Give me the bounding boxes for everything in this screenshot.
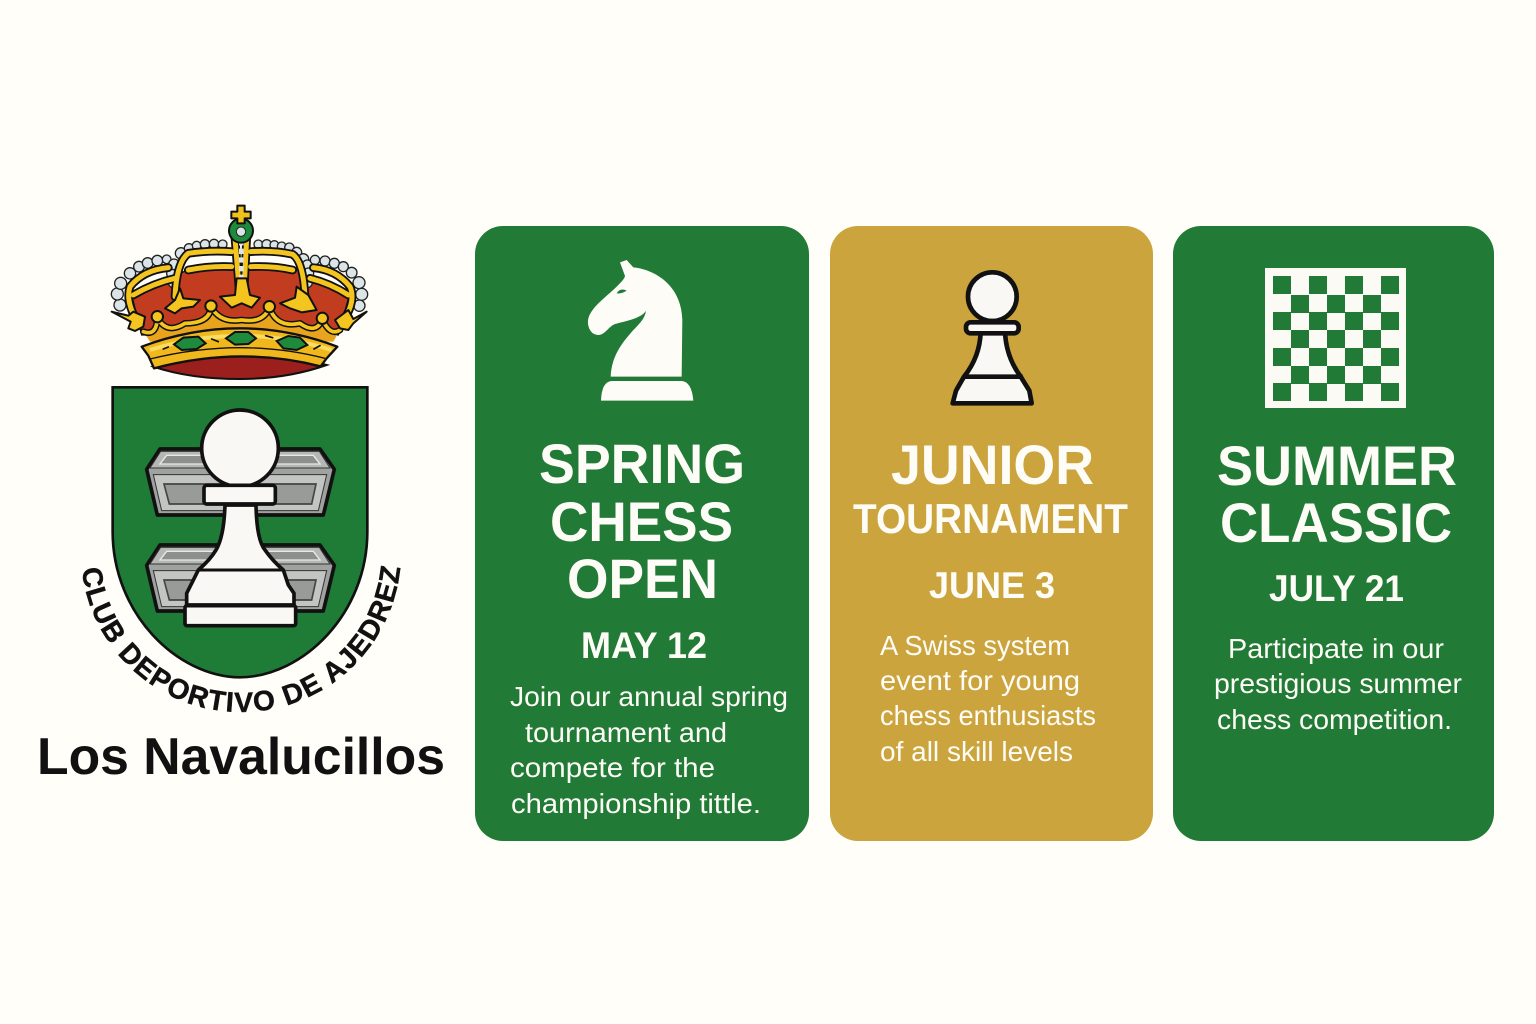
heading: TOURNAMENT xyxy=(853,495,1128,542)
heading: OPEN xyxy=(567,547,718,610)
heading: SPRING xyxy=(539,432,745,495)
description: tournament and xyxy=(525,717,727,748)
icon: pawn xyxy=(953,272,1032,403)
curved club name: CLUB DEPORTIVO DE AJEDREZ xyxy=(82,566,401,712)
icon: royal crown xyxy=(111,206,368,379)
icon: knight xyxy=(588,260,693,401)
panel: spring chess open xyxy=(475,226,809,841)
heading: CLASSIC xyxy=(1220,491,1452,554)
shield with pawn xyxy=(113,387,367,677)
description: prestigious summer xyxy=(1214,668,1462,699)
heading xyxy=(853,433,1128,542)
club name: Los Navalucillos xyxy=(37,728,445,786)
description: Join our annual spring xyxy=(510,681,788,712)
emblem: club crest and name xyxy=(37,204,445,786)
date: JUNE 3 xyxy=(929,565,1055,606)
date: JULY 21 xyxy=(1269,568,1404,609)
date: MAY 12 xyxy=(581,625,707,666)
description xyxy=(880,630,1096,767)
icon: chessboard xyxy=(1265,268,1406,408)
heading: CHESS xyxy=(550,490,733,553)
panel: summer classic xyxy=(1173,226,1494,841)
description: of all skill levels xyxy=(880,736,1073,767)
heading: SUMMER xyxy=(1217,434,1457,497)
description: A Swiss system xyxy=(880,630,1070,661)
heading xyxy=(539,432,745,610)
description: event for young xyxy=(880,665,1080,696)
description: chess competition. xyxy=(1217,704,1452,735)
heading xyxy=(1217,434,1457,554)
description xyxy=(510,681,788,819)
description: championship tittle. xyxy=(511,788,761,819)
panel: junior tournament xyxy=(830,226,1153,841)
description: chess enthusiasts xyxy=(880,700,1096,731)
description xyxy=(1214,633,1462,735)
description: compete for the xyxy=(510,752,715,783)
heading: JUNIOR xyxy=(891,433,1094,496)
description: Participate in our xyxy=(1228,633,1444,664)
